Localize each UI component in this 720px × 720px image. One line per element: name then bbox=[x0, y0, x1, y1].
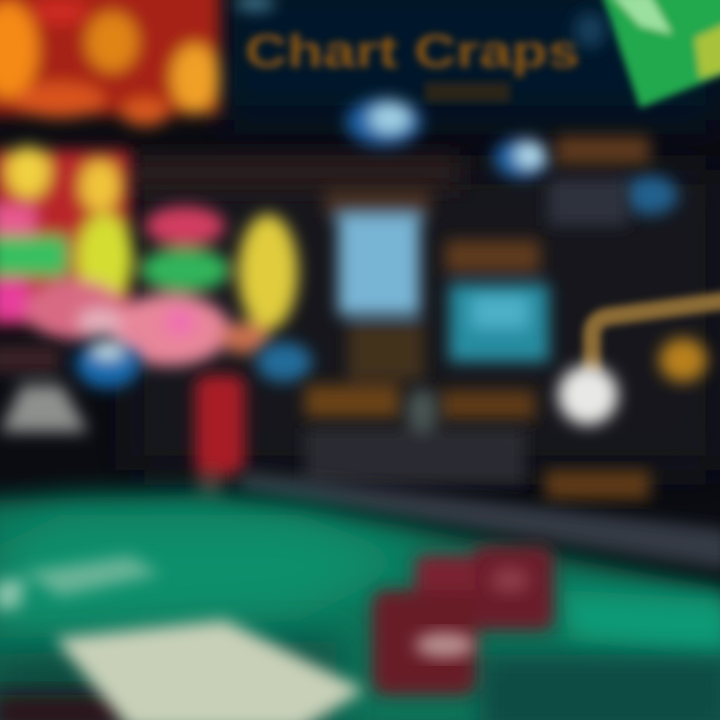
figure in red bbox=[195, 375, 245, 500]
blue lights bbox=[235, 0, 678, 215]
panel: colourful slot machine left bbox=[0, 146, 298, 366]
icon: gold pipe and lamp right bbox=[545, 300, 720, 500]
screen: tall blue bbox=[305, 190, 430, 418]
panel: green felt table bbox=[0, 495, 720, 720]
blue and white lamps beneath slot machine bbox=[0, 340, 312, 432]
heading bbox=[245, 25, 580, 102]
dice bbox=[372, 545, 554, 695]
grey counters bbox=[305, 388, 525, 484]
heading: Chart Craps bbox=[245, 25, 580, 77]
cards on the table bbox=[0, 556, 365, 720]
floor divider bbox=[240, 472, 720, 570]
panel: top left lights bbox=[0, 0, 220, 126]
sign: top right orange label and grey panel bbox=[548, 136, 650, 226]
icon: green banner top right bbox=[600, 0, 720, 108]
screen: teal wide bbox=[440, 240, 549, 420]
